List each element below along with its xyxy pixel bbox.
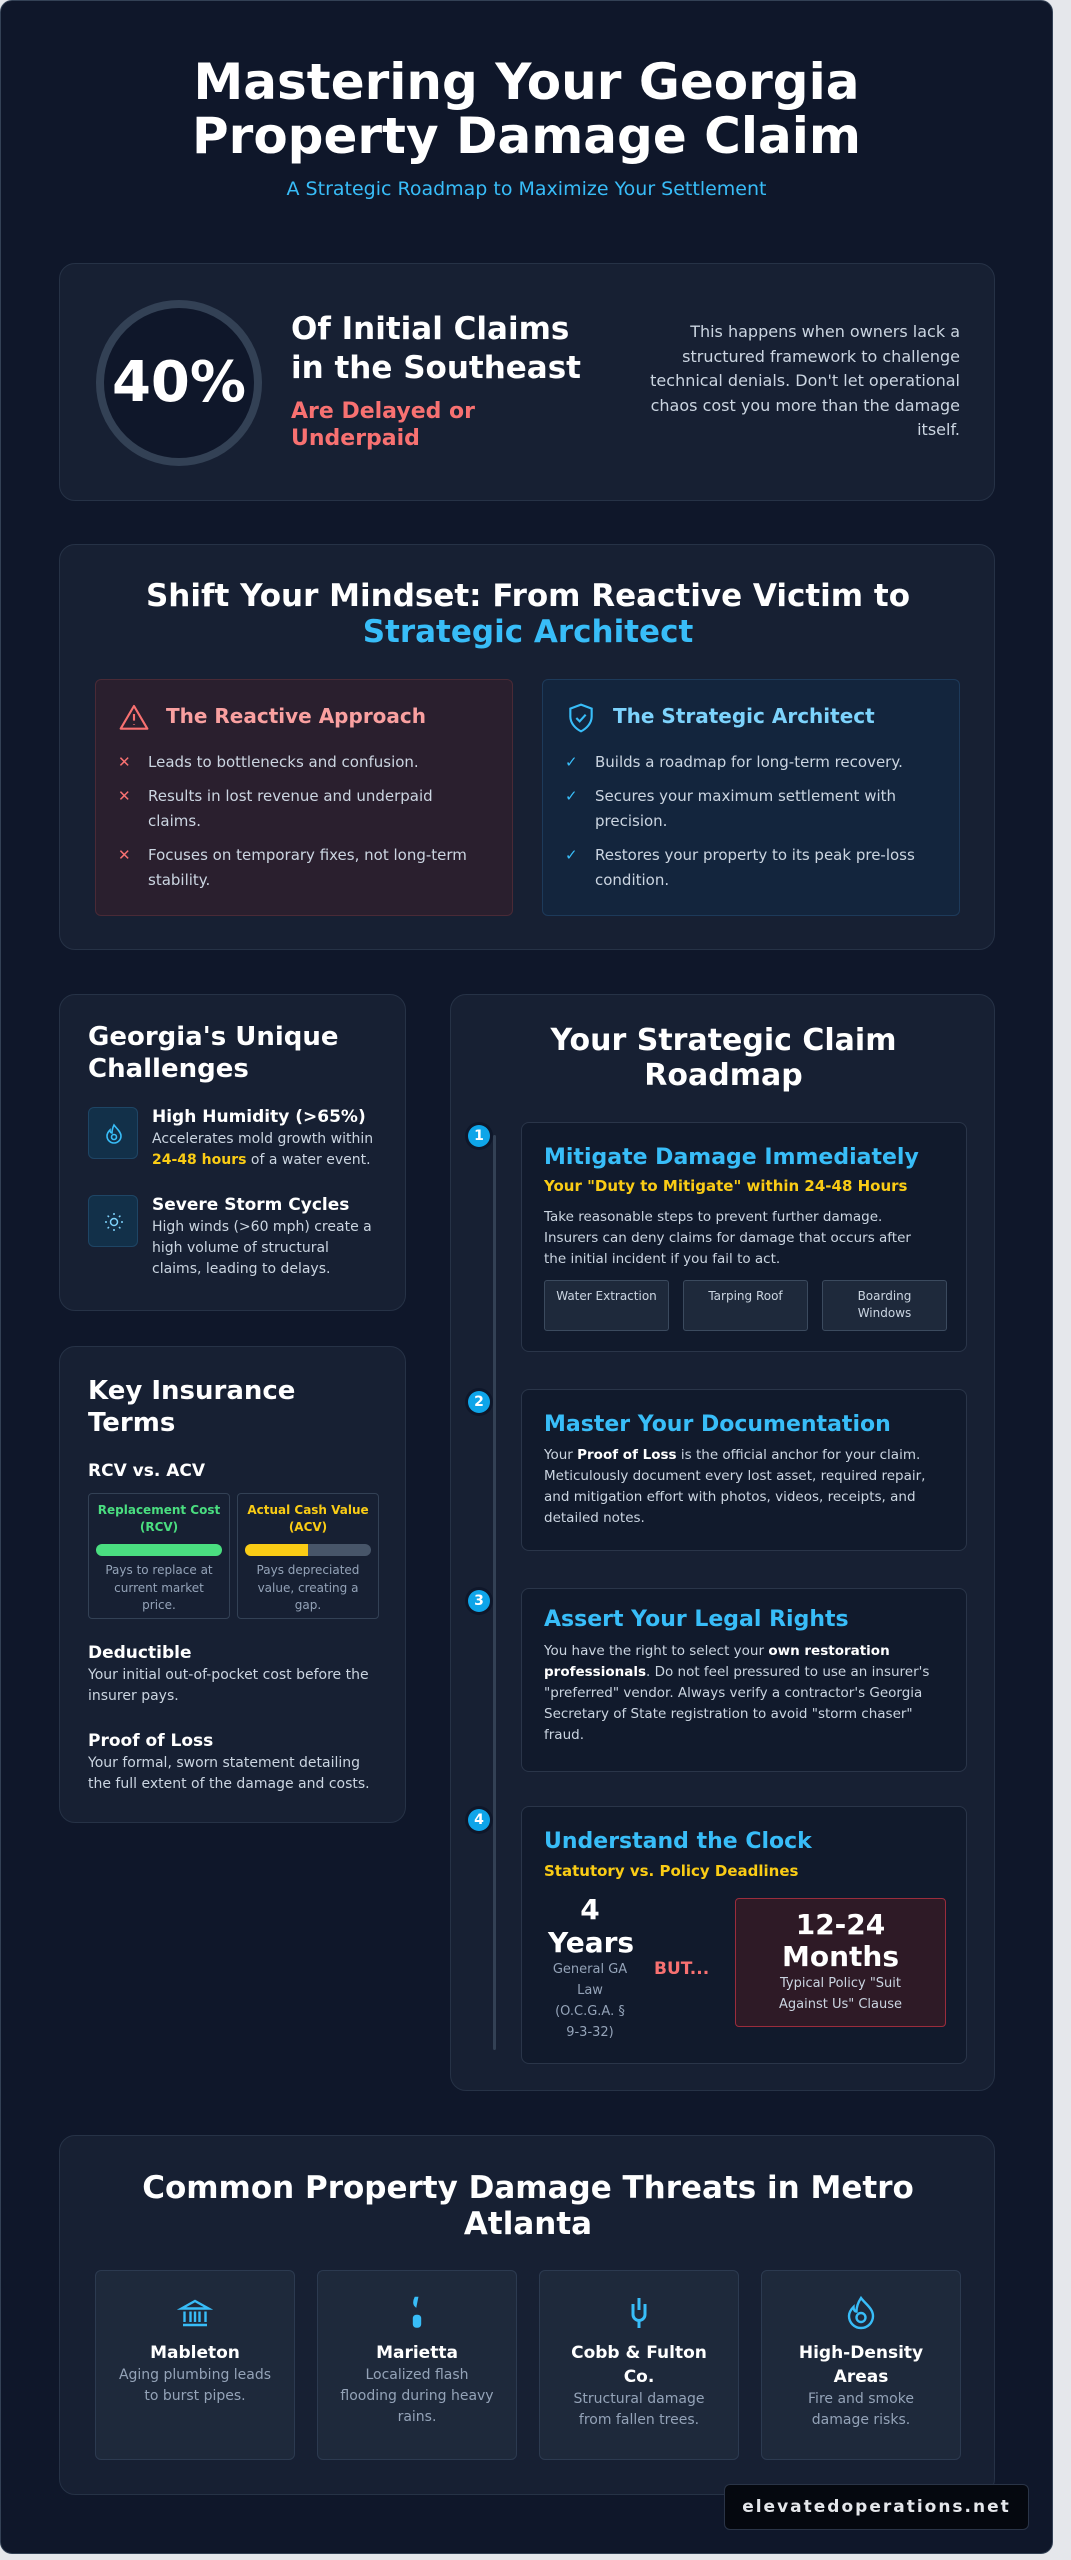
step 1 number [468, 1125, 490, 1147]
humidity text: High Humidity (>65%) [152, 1107, 366, 1127]
stat: 12-24 months: 12-24 [796, 1908, 885, 1941]
threat: mableton: Aging plumbing leads to burst pipes. [119, 2367, 271, 2404]
term: proof of loss: Your formal, sworn statement detailing the full extent of the damage and costs. [88, 1755, 370, 1792]
stat explanation: This happens when owners lack a structured framework to challenge technical denials. Don't let operational chaos cost you more than the damage itself. [650, 322, 960, 439]
terms heading: Key Insurance [88, 1376, 295, 1406]
georgia heading [88, 1022, 339, 1084]
threats heading [142, 2170, 914, 2242]
subtitle: A Strategic Roadmap to Maximize Your Settlement [287, 178, 766, 200]
strategic list: Builds a roadmap for long-term recovery. [595, 753, 903, 771]
acv box: gap. [295, 1598, 321, 1612]
stat: 12-24 months: Months [782, 1940, 899, 1973]
stat: 12-24 months: Against Us" Clause [779, 1997, 902, 2012]
threats heading: Common Property Damage Threats in Metro [142, 2170, 914, 2206]
term: deductible [88, 1643, 369, 1704]
step 2 number [468, 1391, 490, 1413]
panel: georgia challenges [59, 994, 406, 1311]
step 3 number [468, 1590, 490, 1612]
rcv box: Pays to replace at [105, 1563, 213, 1577]
stat heading [291, 311, 581, 386]
step 3 card: You have the right to select your own restoration professionals. Do not feel pressured to use an insurer's "preferred" vendor. Always verify a contractor's Georgia Secretary of State registration to avoid "storm chaser" fraud. [544, 1643, 929, 1743]
threat: marietta: Localized flash flooding during heavy rains. [340, 2367, 494, 2425]
rcv box: current market [114, 1580, 204, 1594]
strategic list [565, 753, 915, 889]
challenge: humidity [88, 1107, 373, 1168]
challenge: storms [88, 1195, 372, 1277]
threats heading: Atlanta [464, 2206, 592, 2242]
strategic heading: The Strategic Architect [613, 704, 875, 728]
georgia heading: Georgia's Unique [88, 1022, 339, 1052]
panel: mindset [59, 544, 995, 950]
stat heading: Of Initial Claims [291, 311, 569, 347]
icon: building [177, 2300, 213, 2326]
step 4 card: Understand the Clock [544, 1829, 812, 1854]
icon: warning [120, 704, 148, 730]
action chips [544, 1280, 947, 1331]
icon: storm [88, 1195, 138, 1247]
action chips: Tarping Roof [708, 1289, 783, 1303]
step 2 card: Master Your Documentation [544, 1412, 891, 1437]
roadmap heading [550, 1023, 896, 1093]
footer badge: website [724, 2484, 1029, 2530]
stat: 4 years [548, 1893, 634, 2040]
step 4 number: 4 [474, 1812, 484, 1828]
box: strategic architect [542, 679, 960, 916]
strategic list: ✓ [565, 787, 578, 805]
storm text: Severe Storm Cycles [152, 1195, 349, 1215]
step 2 number: 2 [474, 1394, 484, 1410]
terms heading: Terms [88, 1408, 175, 1438]
icon: shield check [569, 704, 593, 732]
rcv box: Replacement Cost [98, 1503, 220, 1517]
rcv box [88, 1493, 230, 1619]
threat: mableton: Mableton [150, 2343, 240, 2363]
threat: high-density: High-Density [799, 2343, 923, 2363]
strategic list: ✓ [565, 753, 578, 771]
step 4 card: Statutory vs. Policy Deadlines [544, 1862, 798, 1880]
stat circle 40%: 40% [112, 350, 246, 415]
acv box: (ACV) [289, 1520, 327, 1534]
term: proof of loss: Proof of Loss [88, 1731, 213, 1751]
threat: marietta: Marietta [376, 2343, 458, 2363]
step 2 card: Your Proof of Loss is the official anchor for your claim. Meticulously document every lost asset, required repair, and mitigation effort with photos, videos, receipts, and detailed notes. [544, 1447, 925, 1526]
acv box: Pays depreciated [257, 1563, 359, 1577]
action chips: Water Extraction [556, 1289, 657, 1303]
step 4 card [521, 1806, 967, 2064]
reactive list: ✕ [118, 846, 131, 864]
strategic list: Secures your maximum settlement with precision. [595, 787, 896, 830]
threat: marietta [317, 2270, 517, 2460]
roadmap heading: Your Strategic Claim [551, 1023, 896, 1058]
acv box [237, 1493, 379, 1619]
reactive list: Focuses on temporary fixes, not long-term stability. [148, 846, 467, 889]
reactive list: Leads to bottlenecks and confusion. [148, 753, 419, 771]
panel: key insurance terms [59, 1346, 406, 1823]
action chips: Boarding [858, 1289, 911, 1303]
term: proof of loss [88, 1731, 370, 1792]
step 1 card [521, 1122, 967, 1352]
rcv vs acv heading: RCV vs. ACV [88, 1461, 205, 1481]
icon: humidity [88, 1107, 138, 1159]
strategic list: Restores your property to its peak pre-loss condition. [595, 846, 915, 889]
humidity text: Accelerates mold growth within 24-48 hours of a water event. [152, 1131, 373, 1168]
icon: fire [848, 2296, 874, 2330]
threat: cobb & fulton: Cobb & Fulton [571, 2343, 707, 2363]
reactive list [118, 753, 467, 889]
humidity text [152, 1107, 373, 1168]
footer badge: website: elevatedoperations.net [742, 2497, 1011, 2517]
title: Property Damage Claim [192, 107, 861, 165]
stat: 12-24 months: Typical Policy "Suit [780, 1976, 901, 1991]
threat: high-density [761, 2270, 961, 2460]
georgia heading: Challenges [88, 1054, 249, 1084]
terms heading [88, 1376, 295, 1438]
reactive list: ✕ [118, 753, 131, 771]
stat: 4 years: Years [548, 1926, 634, 1959]
stat subheading: Are Delayed or [291, 399, 475, 424]
stat: 4 years: 4 [580, 1893, 600, 1926]
stat: 12-24 months [735, 1898, 946, 2027]
step 3 card [521, 1588, 967, 1772]
threat: cobb & fulton: Structural damage from fallen trees. [574, 2391, 704, 2428]
but label: BUT... [654, 1959, 709, 1979]
reactive list: ✕ [118, 787, 131, 805]
acv box: value, creating a [258, 1580, 358, 1594]
timeline line [493, 1135, 496, 2050]
icon: plug/tree [632, 2298, 646, 2328]
acv box: Actual Cash Value [247, 1503, 369, 1517]
panel: metro atlanta threats [59, 2135, 995, 2495]
step 3 number: 3 [474, 1593, 484, 1609]
reactive heading: The Reactive Approach [166, 704, 426, 728]
mindset heading: Strategic Architect [363, 614, 693, 650]
step 4 number [468, 1809, 490, 1831]
step 3 card: Assert Your Legal Rights [544, 1607, 849, 1632]
stat subheading: Underpaid [291, 426, 420, 451]
step 1 card: Take reasonable steps to prevent further damage. Insurers can deny claims for damage that occurs after the initial incident if you fail to act. [544, 1209, 911, 1267]
term: deductible: Deductible [88, 1643, 191, 1663]
title [192, 53, 861, 165]
step 1 number: 1 [474, 1128, 484, 1144]
threat: mableton [95, 2270, 295, 2460]
threat: cobb & fulton [539, 2270, 739, 2460]
roadmap heading: Roadmap [644, 1058, 803, 1093]
reactive list: Results in lost revenue and underpaid claims. [148, 787, 433, 830]
stat: 4 years: General GA Law (O.C.G.A. § 9-3-32) [553, 1962, 627, 2040]
step 1 card: Mitigate Damage Immediately [544, 1145, 919, 1170]
threat: high-density: Areas [834, 2367, 888, 2387]
term: deductible: Your initial out-of-pocket cost before the insurer pays. [88, 1667, 369, 1704]
rcv box: price. [142, 1598, 176, 1612]
threat: high-density: Fire and smoke damage risks. [808, 2391, 914, 2428]
step 1 card: Your "Duty to Mitigate" within 24-48 Hours [544, 1177, 907, 1195]
panel: statistic [59, 263, 995, 501]
box: reactive approach [95, 679, 513, 916]
threat: cobb & fulton: Co. [624, 2367, 654, 2387]
rcv box: (RCV) [140, 1520, 178, 1534]
mindset heading: Shift Your Mindset: From Reactive Victim to [146, 578, 910, 614]
panel: roadmap [450, 994, 995, 2091]
icon: rain gauge [412, 2296, 422, 2328]
title: Mastering Your Georgia [194, 53, 859, 111]
stat heading: in the Southeast [291, 350, 581, 386]
storm text: High winds (>60 mph) create a high volume of structural claims, leading to delays. [152, 1219, 372, 1277]
strategic list: ✓ [565, 846, 578, 864]
action chips: Windows [858, 1306, 911, 1320]
mindset heading [146, 578, 910, 650]
stat circle 40% [96, 300, 262, 466]
step 2 card [521, 1389, 967, 1551]
stat subheading [291, 399, 475, 451]
